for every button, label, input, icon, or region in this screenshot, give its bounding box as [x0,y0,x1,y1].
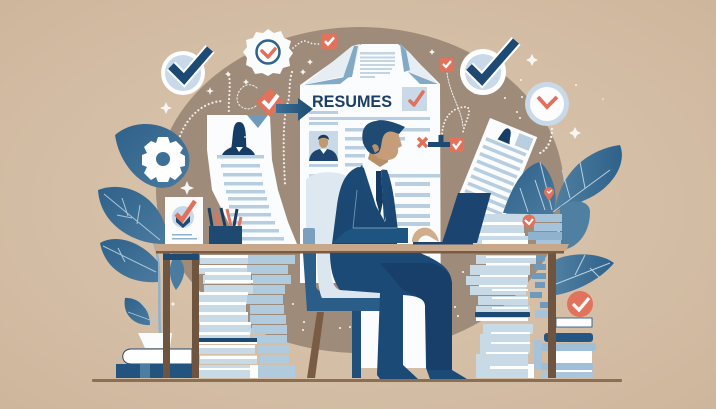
orange check circle on books [567,291,593,317]
chair [303,172,380,378]
left paper stack [196,255,295,378]
pencil cup [209,208,242,244]
leaf with gear [115,124,189,188]
check box on resume [402,87,427,111]
check square right [440,58,454,71]
sleeve [332,228,408,243]
small right leaf [170,255,184,290]
gear icon on leaf [142,137,185,182]
reject connector with X [418,135,464,152]
arrow to large resume [276,98,313,121]
large resume document [300,44,441,368]
upper left leaf [98,187,165,244]
right paper stack under desk [466,255,549,378]
low left leaf [125,298,150,325]
diamond check badge [256,88,284,117]
woman silhouette [222,122,255,155]
person [330,120,467,379]
check badge top right [460,41,516,95]
dotted connectors left [180,41,552,184]
tilted resume [451,118,537,234]
floor line [92,379,622,382]
pin badge on leaf [544,187,554,201]
hand [412,228,439,242]
small check square top [321,34,337,49]
paper stack on desk [471,214,562,244]
plant right [503,145,622,295]
orange badge on stack [522,214,536,228]
desk [154,244,569,378]
legs [330,253,467,379]
torso [332,167,398,244]
left hanging resume [207,115,297,244]
brown backdrop circle [156,27,564,353]
resumes heading: RESUMES [312,92,392,111]
shirt and tie [362,161,389,222]
hair [362,120,405,154]
portrait on resume [309,131,338,161]
ribbon tab [247,115,268,128]
document with check on desk [165,197,203,244]
check badge top left [161,49,210,95]
chevron badge right [525,82,569,126]
neck and face [368,148,389,167]
gear badge top [243,29,293,76]
laptop [413,193,491,244]
potted pot and books [116,333,192,378]
small book stack right [541,318,596,378]
plant left [98,124,189,333]
sparkles [160,49,604,339]
middle left leaf [100,239,158,282]
